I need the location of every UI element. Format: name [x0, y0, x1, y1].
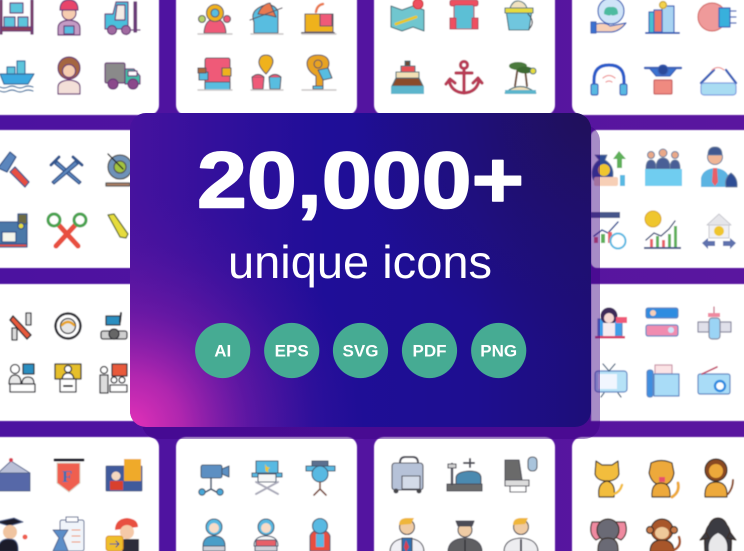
icon: astronaut one — [203, 519, 225, 551]
panel: film crew card — [176, 437, 357, 551]
icon: monkey — [646, 519, 680, 551]
icon: airport terminal — [447, 459, 482, 491]
badge: SVG — [333, 323, 388, 378]
icon: warehouse shelves — [0, 0, 33, 34]
icon: bank exchange — [702, 214, 736, 249]
icon: luggage — [392, 457, 423, 493]
icon: travel map — [391, 0, 424, 31]
icon: elephant — [591, 519, 626, 551]
icon: desk worker — [9, 364, 35, 392]
icon: delivery truck — [105, 63, 140, 89]
icon: presenter screen — [55, 364, 81, 392]
panel: animals card — [572, 437, 744, 551]
panel: business goals card — [176, 0, 357, 115]
icon: television — [595, 364, 627, 397]
icon: fax machine — [647, 365, 679, 397]
icon: lecturer book — [106, 459, 142, 491]
icon: head with pencil — [250, 3, 282, 33]
icon: coin growth chart — [644, 211, 681, 249]
icon: target juggling — [198, 4, 230, 33]
icon: wireless headphones — [591, 65, 627, 95]
icon: anchor — [446, 62, 482, 93]
badge: EPS: EPS — [275, 342, 309, 360]
icon: light bulb and buckets — [252, 55, 281, 89]
icon: astronaut two — [254, 519, 278, 551]
badge: PDF — [402, 323, 457, 378]
panel: airport card — [374, 437, 555, 551]
icon: idea head touch — [307, 55, 332, 89]
icon: studio light — [306, 461, 335, 495]
icon: delivery drone — [645, 65, 681, 94]
icon: support woman — [58, 57, 80, 94]
icon: graduate — [0, 518, 28, 551]
heading: icon count: 20,000+ — [197, 136, 524, 224]
icon: director chair — [252, 461, 282, 494]
icon: growth chart timer — [591, 212, 626, 248]
icon: university pennant — [55, 460, 83, 492]
panel: communication card — [591, 284, 744, 421]
badge: PNG — [471, 323, 526, 378]
panel: workshop card — [0, 284, 138, 421]
icon: penguin — [700, 518, 736, 551]
icon: smart building — [646, 2, 679, 33]
icon: cargo ship — [0, 61, 34, 92]
icon: dog — [649, 460, 678, 497]
icon: circular saw — [106, 154, 132, 186]
icon: ai brain — [698, 3, 736, 31]
icon: mobile marketing — [198, 58, 231, 90]
panel: logistics card — [0, 0, 159, 115]
icon: crossed nails — [51, 157, 82, 184]
icon: forklift — [105, 2, 140, 34]
icon: palm island — [505, 62, 536, 94]
icon: checklist hourglass — [53, 517, 84, 551]
icon: camera mechanic — [101, 313, 127, 339]
icon: aircraft seat — [505, 457, 537, 492]
icon: radio — [698, 367, 730, 394]
panel: travel card — [374, 0, 555, 115]
subheading: unique icons — [228, 236, 492, 288]
icon: backpack — [450, 0, 478, 29]
icon: beach bucket — [505, 1, 533, 30]
ground lines — [198, 34, 336, 90]
panel: tools card — [0, 130, 138, 268]
icon: business woman — [106, 518, 139, 551]
badge: AI — [195, 323, 250, 378]
icon: delivery worker — [58, 0, 80, 35]
icon: cruise ship — [391, 61, 424, 94]
icon: satellite — [698, 307, 731, 339]
format badges — [195, 323, 526, 378]
icon: astronaut three — [310, 518, 330, 551]
icon: swiss knife — [10, 313, 31, 340]
icon: gear gauge — [56, 314, 80, 338]
badge: EPS — [264, 323, 319, 378]
panel: headline — [130, 113, 591, 427]
icon: businessman — [701, 147, 737, 187]
icon: business team — [645, 149, 682, 186]
icon: pilot one — [390, 518, 424, 551]
icon: classroom — [100, 364, 127, 393]
icon: vr glasses — [701, 68, 736, 95]
panel: finance card — [591, 130, 744, 268]
icon: chat bubbles — [646, 308, 678, 336]
icon: laptop design — [302, 4, 334, 33]
icon: hammer — [0, 152, 29, 187]
icon: eco hand — [591, 0, 626, 33]
panel shadow — [142, 125, 600, 439]
icon: lion — [705, 459, 733, 497]
badge: SVG: SVG — [343, 342, 378, 360]
badge: PNG: PNG — [480, 342, 517, 360]
icon: university pennant: F — [62, 467, 72, 486]
icon: scissors — [48, 214, 86, 246]
icon: yellow marker — [108, 214, 128, 238]
icon: cat — [595, 461, 622, 497]
icon: pilot two — [448, 521, 482, 551]
icon: film camera — [199, 465, 229, 495]
badge: AI: AI — [214, 342, 231, 360]
icon: online teacher — [595, 308, 627, 338]
icon: pilot three — [504, 518, 538, 551]
panel: education card — [0, 437, 159, 551]
icon: money bag — [592, 151, 626, 186]
icon: sewing machine — [0, 214, 27, 247]
icon: school building — [0, 458, 30, 491]
panel: technology card — [572, 0, 744, 115]
badge: PDF: PDF — [412, 342, 446, 360]
